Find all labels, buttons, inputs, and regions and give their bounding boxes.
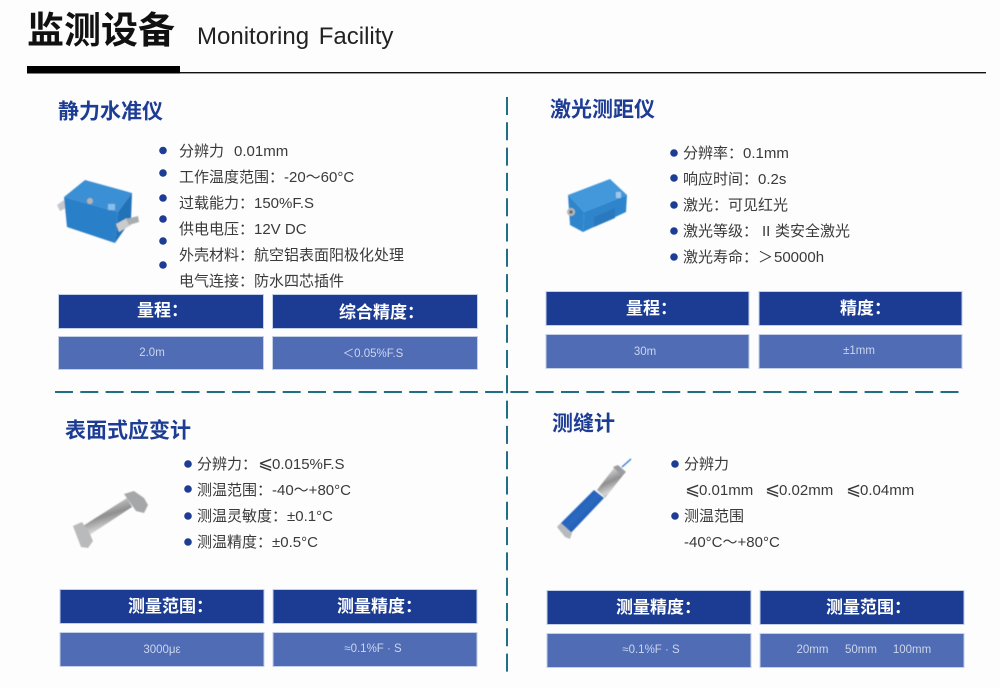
table: 测量精度: ≈0.1%F · S	[622, 644, 680, 656]
spec list: II	[762, 223, 770, 240]
table: 测量精度	[547, 590, 751, 668]
table: 量程: 30m	[634, 346, 656, 358]
spec list: -40°C～+80°C	[684, 534, 780, 551]
heading: 测缝计	[552, 412, 615, 436]
title: English: Monitoring Facility	[197, 23, 393, 50]
spec list: 测温范围	[684, 508, 744, 525]
spec list: 50000h	[774, 249, 824, 266]
spec list: 激光等级：	[683, 223, 758, 240]
heading: 激光测距仪	[550, 98, 655, 122]
spec list: 0.01mm	[234, 143, 288, 160]
table: 测量精度: 测量精度：	[337, 597, 422, 616]
spec bullets	[184, 460, 192, 546]
spec list: 激光：可见红光	[683, 197, 788, 214]
spec list: 0.01mm	[699, 482, 753, 499]
table: 精度: 精度：	[840, 299, 891, 318]
spec bullets	[670, 149, 678, 261]
panel: 测缝计	[547, 412, 964, 668]
spec list: 电气连接：防水四芯插件	[179, 273, 344, 290]
spec list: ⩽	[846, 479, 861, 499]
table: 量程: 量程：	[626, 299, 677, 318]
spec list: 过载能力：150%F.S	[179, 195, 314, 212]
panel: 静力水准仪	[57, 100, 478, 370]
table: 精度: ±1mm	[843, 345, 875, 357]
spec bullets	[671, 460, 679, 520]
spec list: 分辨力：	[197, 456, 257, 473]
table: 测量范围	[760, 590, 964, 668]
spec list: 外壳材料：航空铝表面阳极化处理	[179, 247, 404, 264]
spec list: 测温灵敏度：±0.1°C	[197, 508, 333, 525]
spec list	[684, 456, 914, 551]
panel: 激光测距仪	[546, 98, 962, 368]
table: 测量范围: 50mm	[845, 644, 877, 656]
table: 测量范围	[60, 590, 264, 666]
title: Chinese: 监测设备	[27, 10, 175, 51]
table: 综合精度: ＜0.05%F.S	[343, 348, 404, 360]
icon: static level box	[57, 180, 139, 243]
table: 量程	[546, 292, 749, 368]
page title	[27, 10, 393, 51]
table: 量程: 量程：	[137, 301, 188, 320]
table: 量程	[58, 294, 264, 370]
spec bullets	[159, 147, 167, 269]
spec list	[683, 145, 850, 266]
vertical dashed divider	[506, 97, 508, 672]
spec list: ⩽	[258, 453, 273, 473]
table: 测量精度	[273, 590, 477, 666]
spec list: 供电电压：12V DC	[179, 221, 307, 238]
icon: crack meter	[557, 459, 631, 539]
table: 测量范围: 20mm	[797, 644, 828, 656]
title rule	[27, 66, 986, 74]
heading: 静力水准仪	[58, 100, 163, 124]
spec list: 0.02mm	[779, 482, 833, 499]
spec list: 分辨力	[684, 456, 729, 473]
table: 综合精度	[272, 294, 478, 370]
spec list: 测温精度：±0.5°C	[197, 534, 318, 551]
panel: 表面式应变计	[60, 418, 477, 666]
table: 测量范围: 3000με	[143, 644, 181, 656]
table: 测量精度: 测量精度：	[616, 598, 701, 617]
spec list: 0.04mm	[860, 482, 914, 499]
table: 精度	[759, 292, 962, 368]
table: 综合精度: 综合精度：	[339, 302, 424, 322]
heading: 表面式应变计	[65, 418, 191, 442]
table: 测量范围: 测量范围：	[826, 597, 911, 617]
spec list: ⩽	[685, 479, 700, 499]
spec list: 响应时间：0.2s	[683, 170, 786, 188]
horizontal dashed divider	[55, 391, 959, 393]
spec list: 分辨率：0.1mm	[683, 145, 789, 162]
spec list: 类安全激光	[775, 222, 850, 240]
spec list	[179, 143, 404, 290]
spec list: ⩽	[765, 479, 780, 499]
spec list: 0.015%F.S	[272, 456, 345, 473]
spec list: 激光寿命：＞	[683, 249, 773, 266]
spec list: 测温范围：-40～+80°C	[197, 482, 351, 499]
table: 测量范围: 100mm	[893, 644, 931, 656]
icon: laser rangefinder	[567, 179, 627, 232]
spec list: 分辨力	[179, 143, 224, 160]
icon: strain gauge	[73, 491, 148, 548]
spec list	[197, 453, 351, 551]
table: 量程: 2.0m	[139, 347, 165, 359]
spec list: 工作温度范围：-20～60°C	[179, 169, 354, 186]
table: 测量精度: ≈0.1%F · S	[344, 643, 402, 655]
table: 测量范围: 测量范围：	[128, 596, 213, 616]
